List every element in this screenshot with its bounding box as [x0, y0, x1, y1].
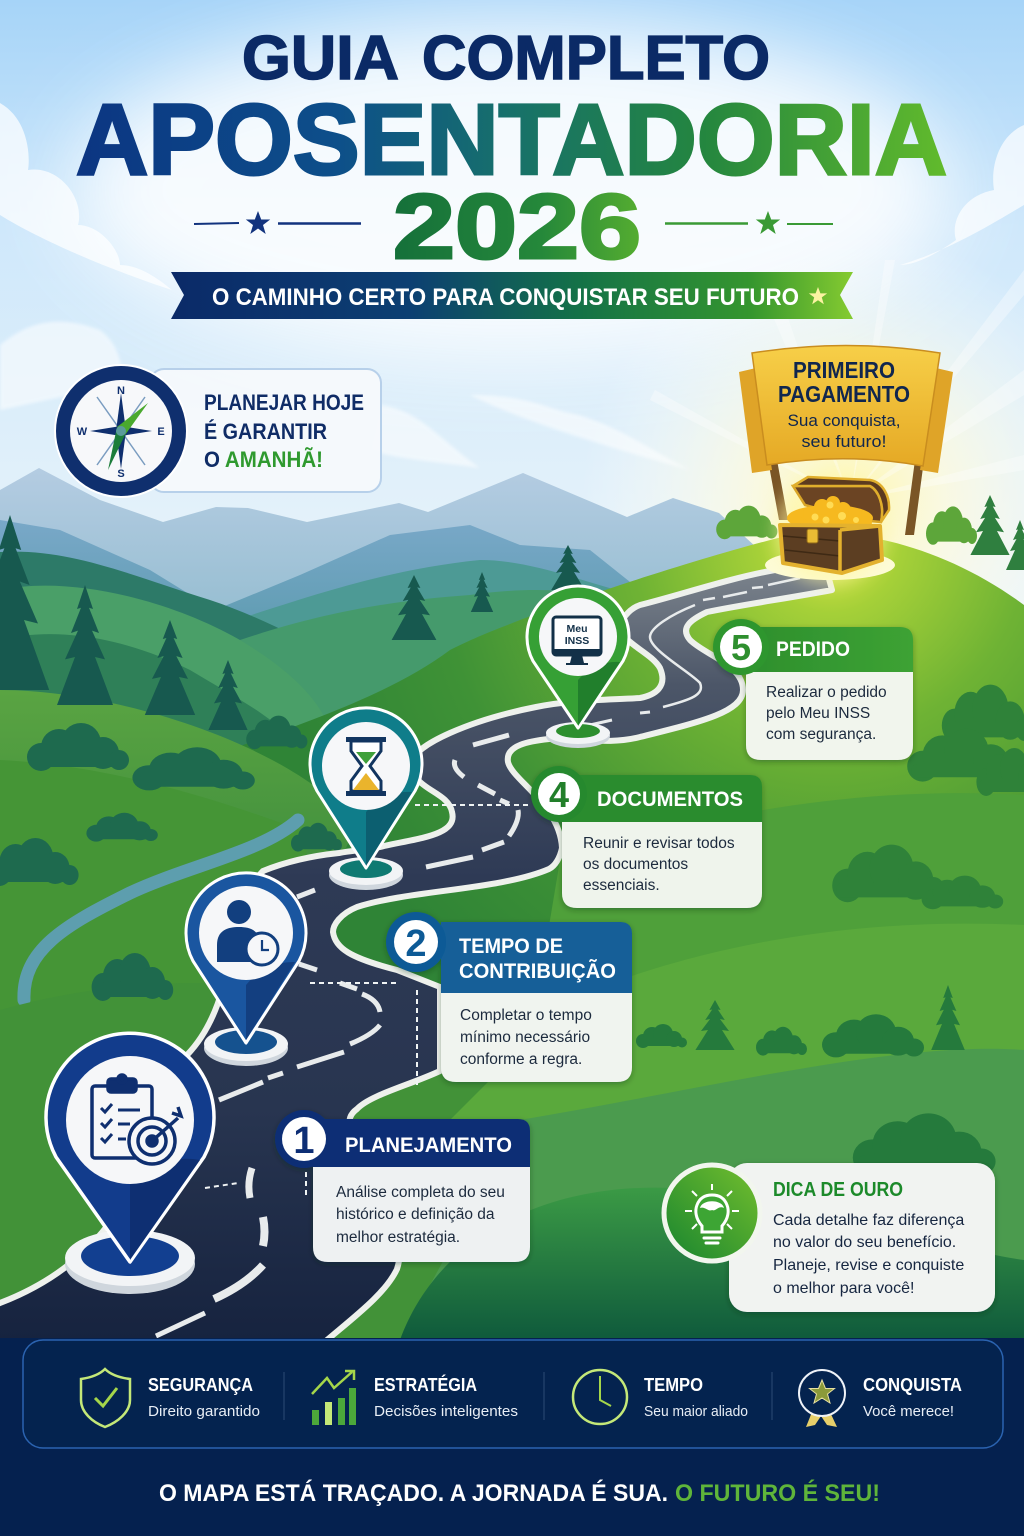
card 5: pedido — [713, 619, 913, 760]
item: tempo: Seu maior aliado — [644, 1403, 748, 1420]
callout: planejar hoje: É GARANTIR — [204, 419, 327, 444]
big sunlit hill — [200, 533, 1024, 1010]
item: conquista — [799, 1370, 962, 1427]
pin 3: hourglass — [310, 708, 422, 890]
title: COMPLETO — [422, 24, 770, 93]
card 2: tempo de contribuição: conforme a regra. — [460, 1051, 582, 1068]
panel: value icons — [23, 1340, 1003, 1448]
card 1: planejamento: Análise completa do seu — [336, 1184, 505, 1201]
pin 2: tempo de contribuição — [186, 873, 306, 1066]
icon: compass: S — [117, 468, 125, 480]
card 5: pedido: 5 — [731, 627, 751, 668]
item: segurança: SEGURANÇA — [148, 1375, 253, 1395]
icon: compass: E — [157, 426, 165, 438]
icon: monitor Meu INSS — [553, 617, 601, 665]
mountains — [0, 468, 770, 720]
card 5: pedido: PEDIDO — [776, 638, 850, 661]
title decoration: stars and lines — [194, 211, 833, 234]
icon: light bulb — [664, 1165, 760, 1261]
card 1: planejamento: 1 — [293, 1120, 315, 1162]
title: APOSENTADORIA — [76, 84, 947, 196]
hills: right slopes — [400, 793, 1024, 1340]
hills: background layers — [0, 552, 640, 820]
item: estratégia — [312, 1371, 518, 1425]
icon: monitor Meu INSS: Meu — [566, 623, 588, 635]
sign: primeiro pagamento: PRIMEIRO — [793, 357, 895, 383]
card 2: tempo de contribuição: mínimo necessário — [460, 1029, 590, 1046]
clouds — [0, 103, 1024, 470]
callout: dica de ouro: no valor do seu benefício. — [773, 1234, 956, 1251]
callout: planejar hoje: O AMANHÃ! — [204, 447, 323, 472]
callout: dica de ouro: DICA DE OURO — [773, 1179, 903, 1201]
card 2: tempo de contribuição: 2 — [405, 923, 427, 965]
icon: compass: W — [77, 426, 88, 438]
footer tagline: O FUTURO É SEU! — [675, 1479, 880, 1507]
icon: compass — [55, 365, 187, 497]
item: tempo — [573, 1370, 748, 1424]
item: segurança: Direito garantido — [148, 1403, 260, 1420]
icon: person with clock — [217, 900, 278, 965]
icon: compass: N — [117, 385, 125, 397]
connector dotted lines — [205, 805, 530, 1198]
subtitle ribbon: O CAMINHO CERTO PARA CONQUISTAR SEU FUTURO — [212, 284, 799, 311]
card 5: pedido: com segurança. — [766, 726, 876, 743]
icon: clipboard with target — [92, 1075, 181, 1164]
item: segurança — [81, 1369, 260, 1427]
item: conquista: Você merece! — [863, 1403, 954, 1420]
footer tagline: O MAPA ESTÁ TRAÇADO. A JORNADA É SUA. — [159, 1479, 668, 1507]
card 1: planejamento: melhor estratégia. — [336, 1229, 460, 1246]
card 2: tempo de contribuição: Completar o tempo — [460, 1007, 592, 1024]
item: conquista: CONQUISTA — [863, 1375, 962, 1395]
callout: dica de ouro: Planeje, revise e conquiste — [773, 1257, 964, 1274]
title — [76, 24, 947, 278]
card 5: pedido: pelo Meu INSS — [766, 705, 870, 722]
card 4: documentos: DOCUMENTOS — [597, 788, 743, 811]
card 5: pedido: Realizar o pedido — [766, 684, 887, 701]
item: estratégia: ESTRATÉGIA — [374, 1374, 477, 1395]
icon: treasure chest — [765, 475, 895, 585]
subtitle ribbon — [171, 272, 853, 319]
card 4: documentos: os documentos — [583, 856, 688, 873]
card 4: documentos: 4 — [549, 774, 569, 815]
sign: primeiro pagamento: PAGAMENTO — [778, 381, 910, 407]
icon: hourglass — [346, 737, 386, 796]
bottom navy band — [0, 1338, 1024, 1536]
callout: dica de ouro: Cada detalhe faz diferença — [773, 1212, 964, 1229]
sign: primeiro pagamento: Sua conquista, — [788, 412, 900, 430]
pin 1: planejamento — [46, 1033, 214, 1294]
sign: primeiro pagamento — [739, 346, 953, 535]
card 4: documentos: essenciais. — [583, 877, 660, 894]
item: estratégia: Decisões inteligentes — [374, 1403, 518, 1420]
title: 2026 — [393, 176, 641, 278]
trees and bushes — [0, 495, 1024, 1176]
card 2: tempo de contribuição: CONTRIBUIÇÃO — [459, 960, 616, 983]
callout: planejar hoje — [150, 369, 381, 492]
sign: primeiro pagamento: seu futuro! — [802, 433, 886, 451]
card 2: tempo de contribuição: TEMPO DE — [459, 935, 563, 958]
card 1: planejamento: histórico e definição da — [336, 1206, 495, 1223]
card 1: planejamento — [275, 1110, 530, 1262]
card 4: documentos — [531, 766, 762, 908]
title: GUIA — [242, 24, 399, 93]
callout: dica de ouro — [729, 1163, 995, 1312]
card 2: tempo de contribuição — [386, 912, 632, 1082]
card 1: planejamento: PLANEJAMENTO — [345, 1134, 512, 1157]
item: tempo: TEMPO — [644, 1375, 703, 1395]
card 4: documentos: Reunir e revisar todos — [583, 835, 735, 852]
pin 4: meu inss — [527, 586, 629, 748]
callout: planejar hoje: PLANEJAR HOJE — [204, 390, 364, 415]
callout: dica de ouro: o melhor para você! — [773, 1280, 914, 1297]
hills: left slopes and river — [0, 690, 640, 1340]
icon: monitor Meu INSS: INSS — [565, 635, 589, 647]
road — [0, 564, 832, 1346]
